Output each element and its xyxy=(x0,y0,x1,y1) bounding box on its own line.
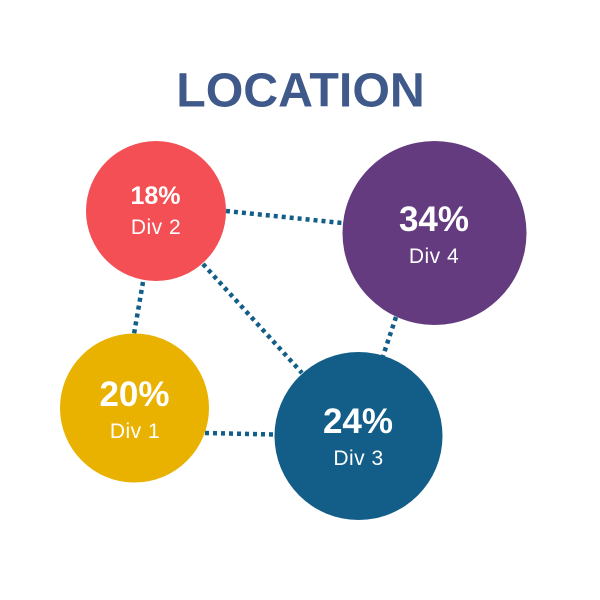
node: Div 2 xyxy=(86,141,226,281)
node: Div 1: Div 1 xyxy=(110,420,160,443)
node: Div 3 xyxy=(274,352,442,520)
node: Div 2: 18% xyxy=(130,182,181,210)
node: Div 3: Div 3 xyxy=(333,447,384,470)
node: Div 2: Div 2 xyxy=(131,216,181,239)
connector: Div 2 to Div 4 xyxy=(226,211,342,223)
node: Div 1: 20% xyxy=(99,375,170,414)
connector: Div 4 to Div 3 xyxy=(383,317,396,356)
connector: Div 2 to Div 3 xyxy=(203,264,302,373)
connector: Div 1 to Div 3 xyxy=(205,433,274,434)
node: Div 4: 34% xyxy=(399,200,469,239)
node: Div 4 xyxy=(342,141,526,325)
node: Div 4: Div 4 xyxy=(409,245,459,268)
title: LOCATION xyxy=(176,64,425,118)
node: Div 1 xyxy=(60,334,209,482)
node: Div 3: 24% xyxy=(323,402,393,441)
connector: Div 2 to Div 1 xyxy=(134,282,143,334)
